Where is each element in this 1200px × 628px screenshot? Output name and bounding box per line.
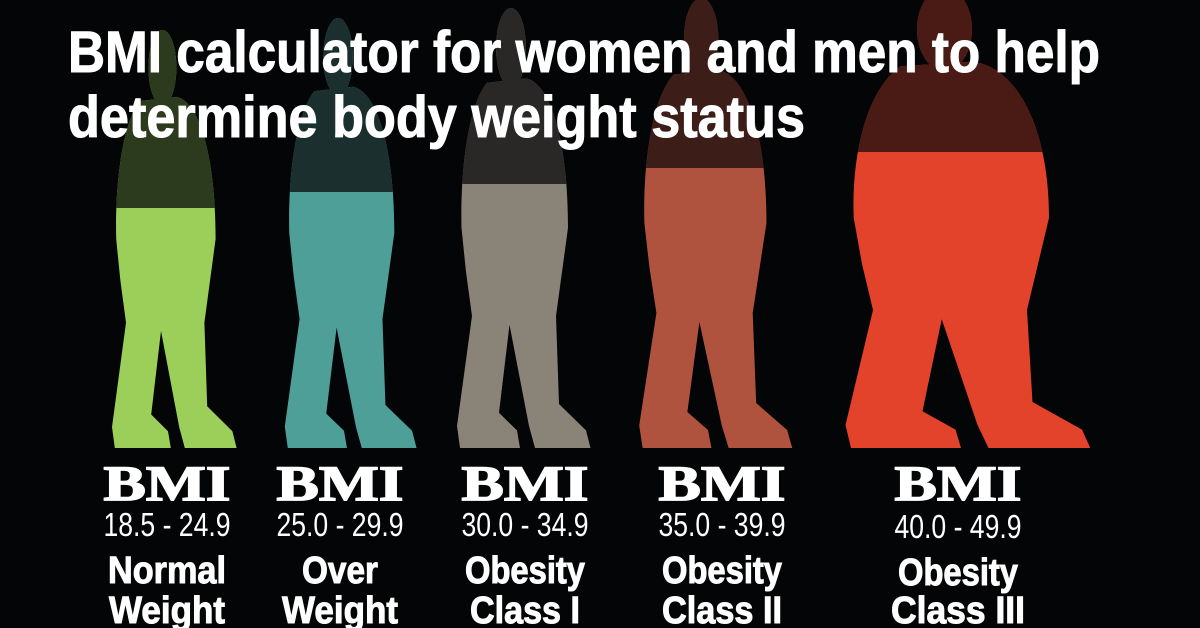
labels: normal weight: 18.5 - 24.9 [104, 506, 230, 543]
title: BMI calculator for women and men to help [68, 20, 1100, 85]
labels: obesity class II: BMI [658, 455, 786, 511]
labels: normal weight [104, 455, 230, 628]
labels: obesity class I: 30.0 - 34.9 [462, 506, 588, 543]
labels: obesity class I [462, 455, 588, 628]
labels: over weight: Over [302, 550, 378, 592]
title [68, 20, 1100, 150]
labels: obesity class III [891, 455, 1025, 628]
figure: obesity class I [457, 8, 590, 448]
figure: obesity class II [639, 0, 792, 448]
labels: obesity class III: 40.0 - 49.9 [894, 508, 1022, 545]
figure: over weight [285, 18, 417, 448]
labels: over weight: 25.0 - 29.9 [276, 506, 404, 543]
labels: obesity class II [658, 455, 786, 628]
labels: obesity class II: 35.0 - 39.9 [658, 506, 786, 543]
title: determine body weight status [68, 85, 805, 150]
figure: normal weight [112, 30, 237, 448]
labels: normal weight: Normal [108, 550, 226, 592]
labels: over weight: BMI [276, 455, 404, 511]
figure: obesity class III [846, 0, 1090, 448]
labels: obesity class II: Obesity [662, 550, 782, 592]
labels: obesity class I: BMI [462, 455, 588, 511]
labels: obesity class I: Obesity [465, 550, 585, 592]
labels: over weight [276, 455, 404, 628]
labels: normal weight: BMI [104, 455, 230, 511]
labels: obesity class III: Obesity [898, 552, 1018, 594]
labels: obesity class III: BMI [894, 455, 1022, 511]
